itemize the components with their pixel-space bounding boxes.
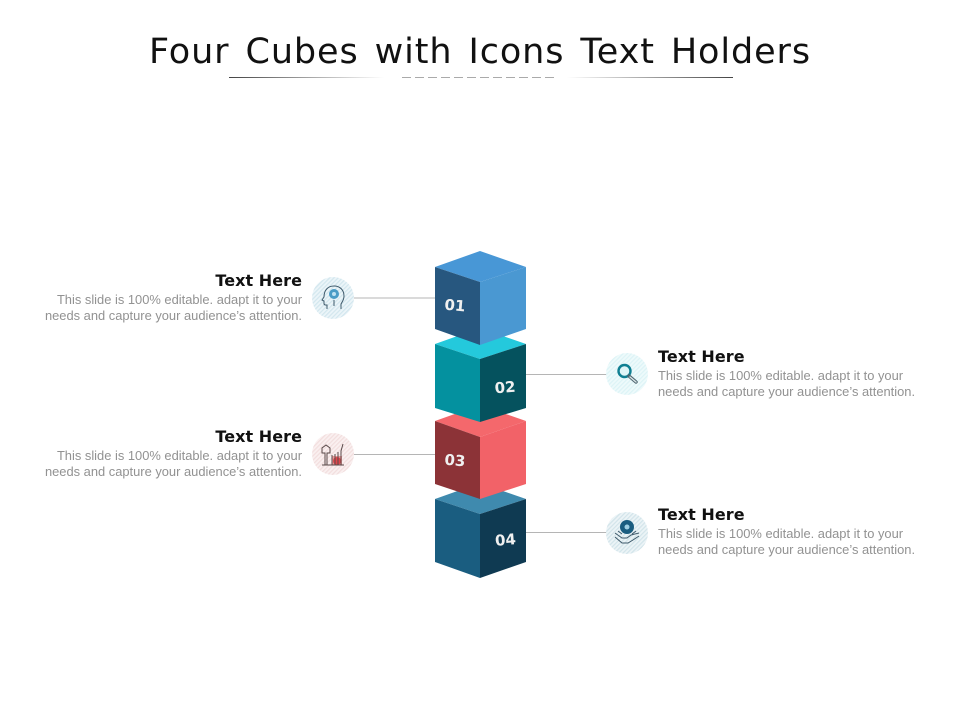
cube 03: 03	[444, 451, 466, 470]
text block: 03: This slide is 100% editable. adapt it to your	[57, 448, 302, 463]
icon: oil pump and chart	[312, 433, 354, 475]
icon: magnifier	[606, 353, 648, 395]
text block: 04: needs and capture your audience’s attention.	[658, 542, 915, 557]
cube 02: 02	[494, 378, 516, 397]
text block: 02: This slide is 100% editable. adapt it to your	[658, 368, 903, 383]
text block: 01	[45, 271, 302, 323]
icon: hands holding globe gear	[606, 512, 648, 554]
cube 04	[435, 483, 526, 578]
cube 01: 01	[444, 296, 466, 315]
cube 01	[435, 251, 526, 345]
icon: head with lightbulb	[312, 277, 354, 319]
text block: 04: This slide is 100% editable. adapt it to your	[658, 526, 903, 541]
connector: 03	[353, 454, 436, 456]
text block: 02	[658, 347, 915, 399]
text block: 04: Text Here	[658, 505, 745, 524]
text block: 02: Text Here	[658, 347, 745, 366]
text block: 01: This slide is 100% editable. adapt it to your	[57, 292, 302, 307]
text block: 02: needs and capture your audience’s attention.	[658, 384, 915, 399]
cube 02	[435, 328, 526, 422]
title underline	[229, 77, 733, 78]
text block: 03: needs and capture your audience’s attention.	[45, 464, 302, 479]
cube 04: 04	[494, 530, 517, 550]
title: Four Cubes with Icons Text Holders	[149, 32, 811, 72]
text block: 01: needs and capture your audience’s attention.	[45, 308, 302, 323]
text block: 01: Text Here	[215, 271, 302, 290]
connector: 01	[353, 297, 436, 299]
connector: 04	[525, 532, 608, 534]
text block: 04	[658, 505, 915, 557]
connector: 02	[525, 374, 608, 376]
text block: 03	[45, 427, 302, 479]
text block: 03: Text Here	[215, 427, 302, 446]
cube 03	[435, 405, 526, 499]
